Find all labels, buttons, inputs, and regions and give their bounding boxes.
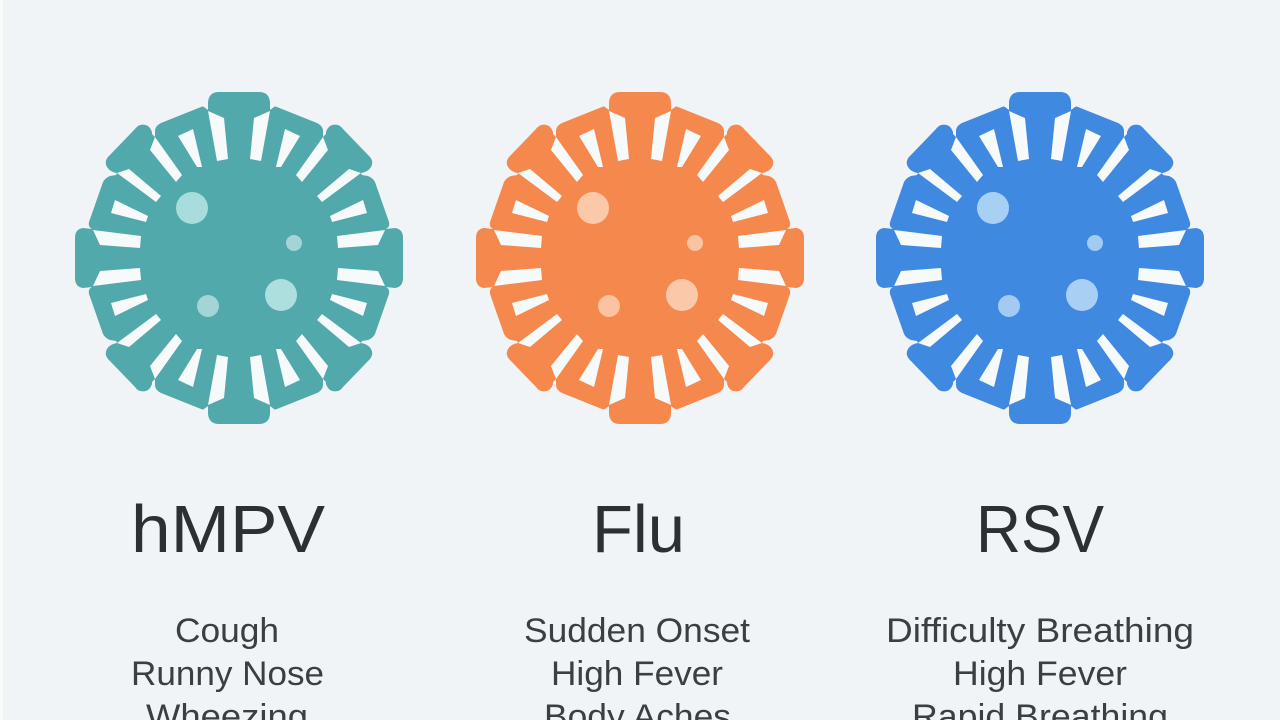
symptoms: hMPV — [131, 612, 324, 720]
icon: Flu virus — [476, 92, 804, 424]
symptoms: Flu — [524, 612, 751, 720]
symptoms: Flu: High Fever — [551, 655, 723, 693]
icon: hMPV virus — [75, 92, 403, 424]
icon: RSV virus — [876, 92, 1204, 424]
symptoms: hMPV: Runny Nose — [131, 655, 324, 693]
panel: hMPV — [75, 92, 403, 720]
panel: RSV — [876, 92, 1204, 720]
symptoms: Flu: Sudden Onset — [524, 612, 751, 650]
symptoms: RSV: Difficulty Breathing — [886, 612, 1194, 650]
heading: Flu: Flu — [592, 492, 685, 567]
panel: Flu — [476, 92, 804, 720]
symptoms: RSV — [886, 612, 1194, 720]
symptoms: hMPV: Cough — [175, 612, 279, 650]
heading: hMPV: hMPV — [131, 492, 325, 567]
symptoms: RSV: High Fever — [953, 655, 1127, 693]
heading: RSV: RSV — [976, 492, 1104, 567]
